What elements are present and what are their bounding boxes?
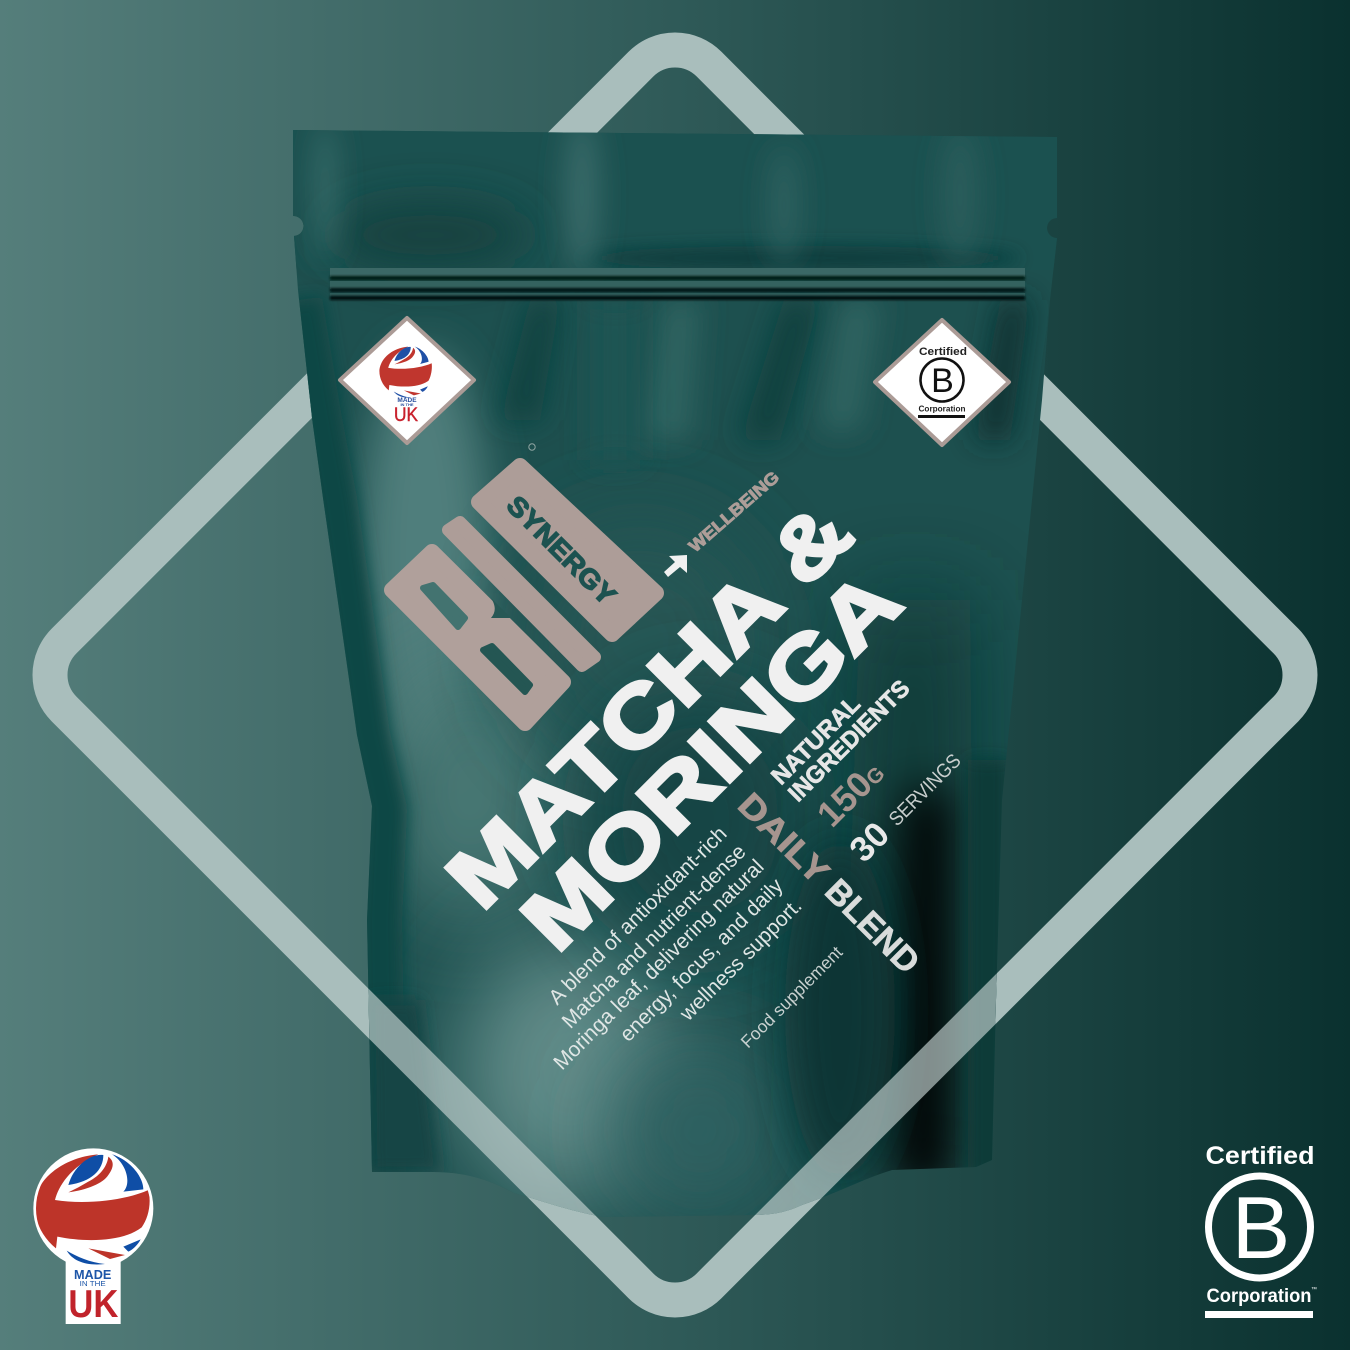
in the label: IN THE [80,1281,106,1288]
blend label: BLEND [817,872,927,981]
logo hole upper [423,585,465,627]
certified label: Certified [1206,1142,1314,1170]
title line two: MORINGA [503,553,918,968]
small B ring [920,358,964,402]
small made in label: MADE [397,397,417,404]
description paragraph: A blend of antioxidant-rich [544,822,732,1009]
pouch [293,130,1057,1216]
synergy wordmark: SYNERGY [501,490,622,611]
translucent front of the diamond frame [368,973,997,1216]
zip seal [330,268,1025,300]
made label: MADE [74,1268,111,1282]
food supplement label: Food supplement [737,942,847,1052]
title line one: MATCHA & [428,484,869,926]
trademark mark: ™ [1311,1286,1317,1293]
wellbeing label: WELLBEING [685,468,783,556]
small corporation label: Corporation [918,404,966,414]
logo block: I [448,522,595,666]
small underline bar [918,415,965,418]
logo block: B [392,552,563,723]
badge: made in the UK [33,1148,153,1326]
logo block: synergy tag [479,466,656,634]
small B letter: B [931,362,954,400]
logo notch [491,598,511,618]
description paragraph: Matcha and nutrient-dense [558,840,751,1033]
natural ingredients label: NATURAL [766,691,866,790]
underline bar [1205,1311,1313,1318]
description paragraph: wellness support. [675,894,807,1026]
weight label: 150G [809,752,892,835]
description paragraph: Moringa leaf, delivering natural [549,855,769,1075]
badge: made in the UK on pouch [340,318,474,443]
registered mark [529,444,535,450]
B letter: B [1232,1178,1290,1277]
icon: arrow [664,555,687,577]
brand logo: BIO Synergy [392,444,656,723]
description paragraph: energy, focus, and daily [616,874,788,1046]
pouch body shading [280,115,1070,1230]
small in the label: IN THE [400,402,414,407]
UK label: UK [68,1282,119,1326]
small certified label: Certified [919,346,967,358]
servings word: SERVINGS [885,750,966,831]
small UK label: UK [394,405,418,426]
badge: certified B corporation on pouch [875,320,1009,445]
corporation label: Corporation [1206,1286,1312,1307]
servings label: 30 [842,815,897,870]
pouch header band above the seal [294,130,1014,268]
folds under the seal [500,300,1030,460]
daily label: DAILY [730,786,837,892]
globe flag [35,1154,150,1264]
icon: small UK globe [379,347,432,398]
logo hole lower [483,646,530,692]
badge white base [33,1148,153,1324]
badge: certified B corporation [1205,1142,1317,1318]
natural ingredients label: INGREDIENTS [783,675,915,807]
B ring [1208,1176,1310,1278]
